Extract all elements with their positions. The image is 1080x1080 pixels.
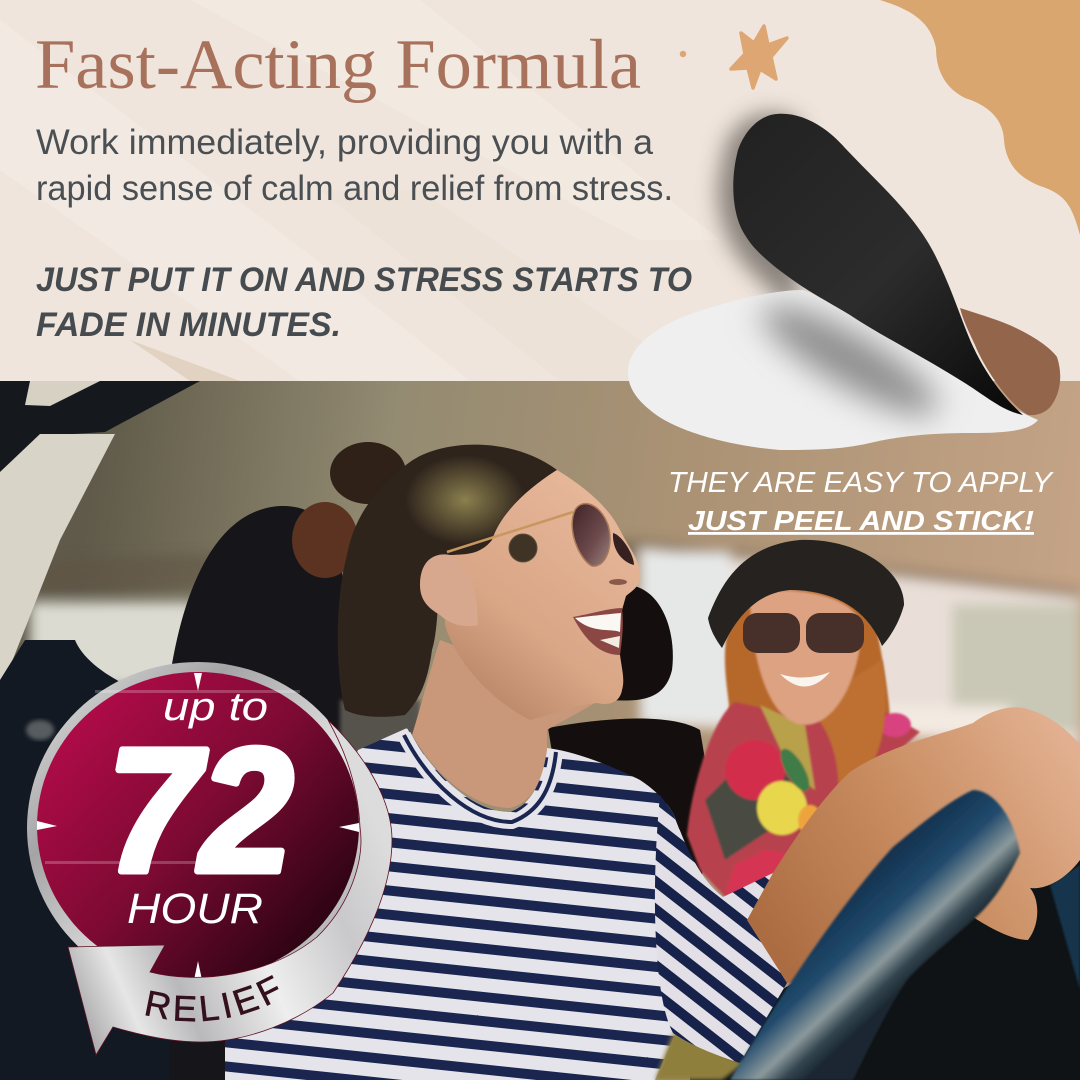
photo: car interior scene bbox=[0, 381, 1080, 1080]
main woman: hair bbox=[292, 442, 557, 717]
badge text: 72: 72 bbox=[107, 713, 293, 909]
floral shirt bbox=[687, 702, 920, 897]
text block: emphasis: JUST PUT IT ON AND STRESS STARTS TO bbox=[36, 261, 692, 299]
badge ticks bbox=[37, 673, 359, 980]
main woman: sunglasses bbox=[447, 504, 634, 566]
badge text: hour: HOUR bbox=[127, 885, 263, 933]
text block: emphasis: FADE IN MINUTES. bbox=[36, 306, 341, 344]
badge text: up to: up to bbox=[163, 685, 268, 729]
sweater collar stripe bbox=[404, 735, 556, 822]
left pillar and door frame bbox=[0, 381, 200, 1080]
icon: star and dot bbox=[682, 26, 787, 88]
yellow bokeh floor bbox=[655, 1033, 745, 1080]
sunglasses bbox=[743, 613, 864, 653]
face bbox=[750, 591, 862, 725]
title: Fast-Acting Formula bbox=[35, 26, 641, 104]
callout: easy to apply: THEY ARE EASY TO APPLY bbox=[668, 467, 1055, 499]
blue door reflection bbox=[1050, 865, 1080, 990]
badge highlights bbox=[45, 690, 300, 864]
hat bbox=[708, 540, 904, 648]
main woman: neck bbox=[412, 640, 600, 808]
text block: emphasis bbox=[36, 261, 692, 344]
flap cast shadow bbox=[750, 287, 950, 433]
badge face bbox=[37, 672, 359, 980]
sleeve bbox=[655, 795, 787, 1063]
text block: description: rapid sense of calm and relief from stress. bbox=[36, 169, 673, 208]
forearm and hand bbox=[747, 707, 1080, 983]
badge: 72 hour relief bbox=[27, 662, 392, 1056]
patch on temple bbox=[509, 534, 537, 562]
callout: easy to apply bbox=[668, 467, 1055, 536]
badge ribbon bbox=[68, 720, 392, 1055]
driver seat headrest bbox=[170, 506, 352, 1080]
ear bbox=[420, 554, 478, 626]
smile bbox=[780, 672, 830, 687]
passenger woman bbox=[687, 540, 920, 897]
sweater collar bbox=[404, 735, 556, 822]
callout: easy to apply: JUST PEEL AND STICK! bbox=[688, 505, 1034, 536]
white backing bbox=[628, 290, 1038, 450]
main woman: face bbox=[445, 470, 640, 720]
image: peel and stick patch bbox=[628, 113, 1060, 450]
car ceiling bbox=[0, 381, 1080, 1080]
text block: description bbox=[36, 123, 673, 208]
hair lock bbox=[820, 660, 886, 784]
badge ring bbox=[27, 662, 369, 994]
passenger seat bbox=[548, 585, 712, 890]
nostril bbox=[609, 579, 627, 585]
panel: top background bbox=[0, 0, 1080, 381]
decorative orange wave blob bbox=[880, 0, 1080, 235]
main woman: striped sweater bbox=[225, 728, 693, 1080]
patch shadow bbox=[718, 113, 805, 320]
black flap bbox=[733, 114, 1023, 415]
mouth bbox=[573, 608, 623, 655]
dark lower right foreground bbox=[690, 860, 1080, 1080]
cork underside bbox=[960, 308, 1060, 415]
background windows bbox=[0, 540, 1080, 745]
hair back bbox=[723, 590, 892, 716]
gap behind shoulder bbox=[340, 700, 420, 760]
steering wheel bbox=[730, 790, 1020, 1080]
badge text: relief: RELIEF bbox=[145, 975, 279, 1022]
text block: description: Work immediately, providing you with a bbox=[36, 123, 654, 162]
